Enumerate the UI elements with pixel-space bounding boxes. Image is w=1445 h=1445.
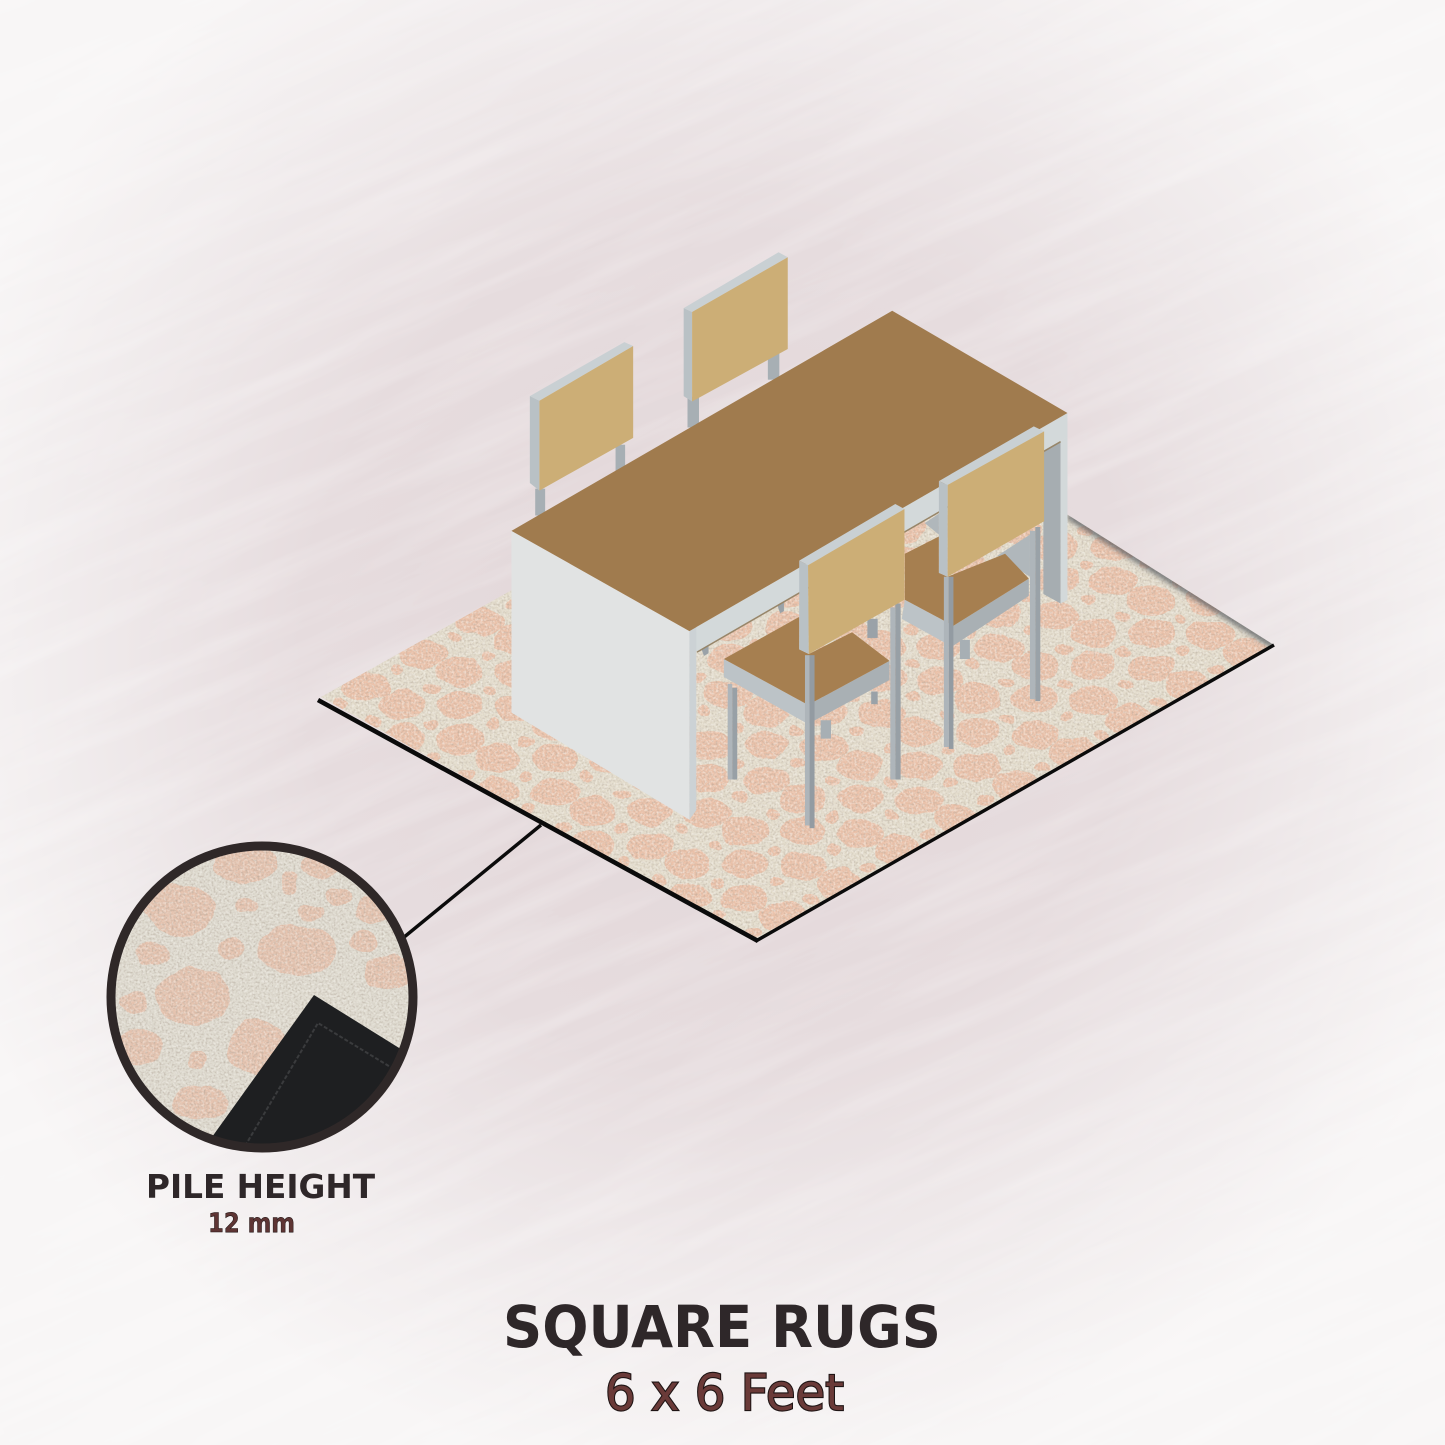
near left chair (724, 504, 904, 828)
far right chair (684, 252, 788, 427)
furniture: dining table with four chairs (511, 252, 1067, 828)
table right end (1043, 441, 1061, 604)
near right chair (867, 426, 1044, 749)
title block (503, 1293, 941, 1422)
pile height label (146, 1167, 375, 1239)
black rug backing (213, 995, 400, 1144)
pile height heading: PILE HEIGHT (146, 1167, 375, 1206)
table far legs (701, 644, 709, 656)
rug edge: black lower left border (318, 700, 758, 941)
rug edge: black lower right border (756, 645, 1274, 941)
title: SQUARE RUGS (503, 1293, 941, 1361)
rug: patterned square rug in isometric view (226, 333, 1401, 999)
far left chair (530, 342, 633, 516)
pile height value: 12 mm (208, 1208, 295, 1239)
close-up rug texture (116, 850, 408, 1144)
inset ring (111, 846, 413, 1148)
circular detail inset: rug close-up with folded black backing (105, 840, 420, 1155)
table left side (511, 531, 689, 820)
dining table (511, 311, 1067, 820)
table top (511, 311, 1067, 631)
callout connector line (403, 825, 541, 938)
size subtitle: 6 x 6 Feet (605, 1364, 844, 1422)
rug surface with pattern (321, 252, 1272, 938)
table apron (689, 413, 1067, 651)
